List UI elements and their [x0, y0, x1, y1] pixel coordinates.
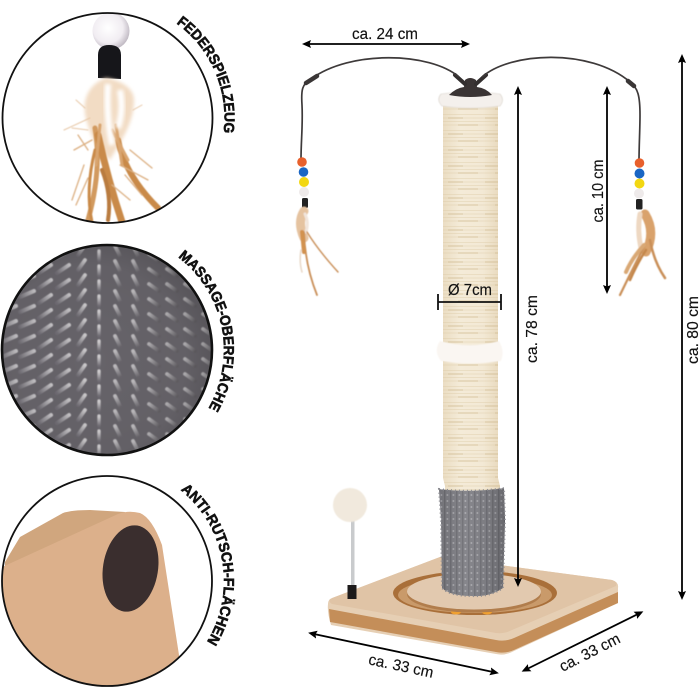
edge shading [33, 246, 210, 436]
arrow [314, 634, 493, 672]
circle outline [2, 476, 212, 686]
central disc [407, 574, 541, 610]
wooden base [328, 557, 618, 655]
wire [482, 57, 640, 162]
right wand and feather toy [482, 57, 665, 295]
wire [301, 58, 459, 160]
groove floor [398, 577, 552, 613]
dark rubber background [0, 240, 216, 460]
arrow [606, 92, 608, 288]
black cap [98, 45, 121, 79]
rod [351, 518, 354, 586]
cork base close-up [0, 510, 179, 700]
panel: massage surface detail [0, 244, 234, 456]
label: Ø 7cm [448, 282, 492, 299]
arrow [308, 43, 464, 45]
white feather highlight [108, 84, 122, 145]
anti-slip pad [102, 525, 158, 612]
back edge [5, 510, 125, 572]
curved label: ANTI-RUTSCH-FLÄCHEN [180, 484, 236, 646]
bracket [438, 294, 501, 310]
groove [393, 571, 557, 615]
cork surface [0, 512, 179, 700]
product: scratching post [297, 57, 665, 655]
base brown band [329, 592, 618, 653]
label: ca. 33 cm [557, 630, 623, 676]
base top surface [330, 557, 616, 633]
central disc edge [407, 576, 541, 612]
feathers [620, 214, 665, 295]
arrow [527, 614, 638, 669]
joint [306, 76, 317, 83]
spring toy [333, 488, 367, 599]
cap [302, 198, 308, 208]
panel: anti-slip surface detail [1, 475, 236, 687]
dimension: post diameter [438, 282, 501, 310]
beads [634, 158, 644, 198]
left wand and feather toy [297, 58, 459, 295]
dimension: base width [527, 614, 638, 676]
curved label: FEDERSPIELZEUG [176, 16, 235, 133]
massage sleeve [439, 488, 505, 596]
foot [348, 585, 356, 599]
panel: feather toy detail [2, 12, 235, 224]
wand holder [449, 75, 492, 97]
toy balls in track [451, 610, 492, 614]
cap [636, 199, 642, 210]
dimension: base depth [314, 634, 493, 682]
label: ca. 24 cm [352, 26, 418, 43]
circle outline [2, 13, 212, 223]
label: ca. 78 cm [524, 295, 541, 363]
label: ca. 10 cm [590, 160, 607, 222]
circle outline [2, 245, 212, 455]
base silhouette [328, 557, 618, 655]
orange feather strands [64, 100, 158, 222]
sisal column [443, 103, 500, 500]
massage spikes close-up [0, 240, 216, 460]
curved label: MASSAGE-OBERFLÄCHE [178, 250, 234, 413]
feathers [300, 211, 338, 295]
top plush ring [439, 92, 502, 108]
feather toy close-up [64, 12, 158, 222]
middle plush ring [437, 341, 503, 364]
arrow [517, 92, 519, 581]
label: ca. 33 cm [367, 651, 435, 682]
white feather [85, 78, 134, 160]
beads [297, 157, 309, 197]
spike columns [0, 240, 216, 460]
joint [628, 81, 634, 86]
bead [92, 12, 130, 50]
pom-pom [333, 488, 367, 522]
arrow [681, 60, 683, 594]
